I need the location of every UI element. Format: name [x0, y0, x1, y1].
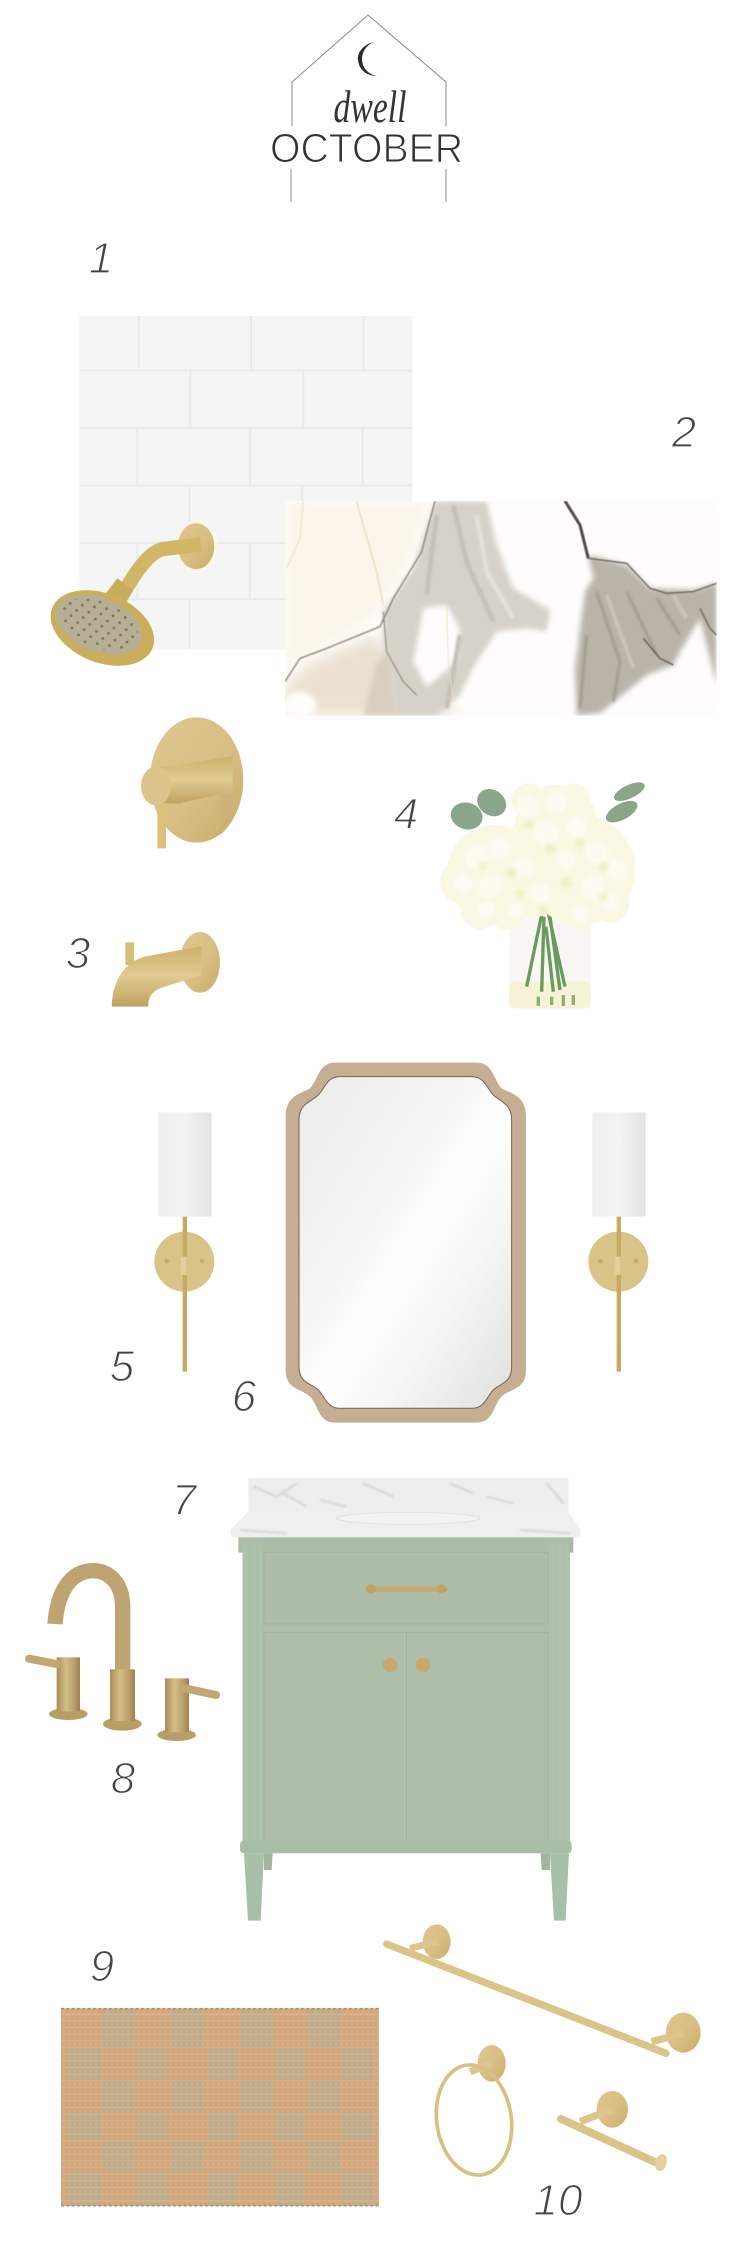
- icon: gold shower valve trim: [141, 717, 243, 848]
- vase: [509, 917, 591, 1008]
- base and legs: [240, 1841, 572, 1853]
- panel: sage green vanity with marble top: [230, 1478, 581, 1921]
- icon: gold towel ring: [429, 2045, 519, 2180]
- icon: white hydrangea bouquet in clear vase: [440, 779, 647, 1008]
- icon: gold tub spout: [112, 932, 220, 1007]
- cabinet body: [238, 1537, 573, 1553]
- logo script: dwell: dwell: [334, 81, 406, 132]
- icon: scalloped wood framed mirror: [286, 1063, 526, 1423]
- number 1: 1: [89, 234, 113, 283]
- number 10: 10: [534, 2176, 583, 2225]
- number 7: 7: [172, 1476, 198, 1525]
- icon: brushed gold widespread faucet: [29, 1571, 216, 1741]
- logo word: October: OCTOBER: [270, 125, 463, 171]
- house outline: [291, 15, 446, 202]
- number 4: 4: [394, 790, 418, 839]
- number 8: 8: [111, 1754, 136, 1803]
- icon: gold toilet paper holder: [561, 2091, 669, 2172]
- icon: left wall sconce: [154, 1112, 214, 1372]
- panel: calacatta marble swatch: [283, 501, 717, 718]
- flower heads: [440, 783, 635, 930]
- number 6: 6: [232, 1372, 257, 1421]
- marble top: [230, 1478, 581, 1537]
- icon: gold towel bar: [387, 1924, 701, 2053]
- icon: gold shower head and arm: [39, 520, 217, 680]
- logo: dwell October house: [270, 15, 463, 202]
- number 3: 3: [66, 929, 91, 978]
- doors: [264, 1633, 406, 1842]
- panel: jute checkered rug: [61, 2008, 379, 2206]
- icon: crescent moon: [358, 42, 377, 76]
- door knobs: [383, 1658, 397, 1672]
- drawer: [264, 1553, 548, 1624]
- eucalyptus leaves: [448, 779, 647, 833]
- drawer pull: [366, 1587, 448, 1592]
- panel: white subway tile swatch: [79, 316, 412, 650]
- number 9: 9: [90, 1942, 114, 1991]
- number 5: 5: [110, 1342, 135, 1391]
- number 2: 2: [671, 408, 696, 457]
- icon: right wall sconce: [588, 1112, 648, 1372]
